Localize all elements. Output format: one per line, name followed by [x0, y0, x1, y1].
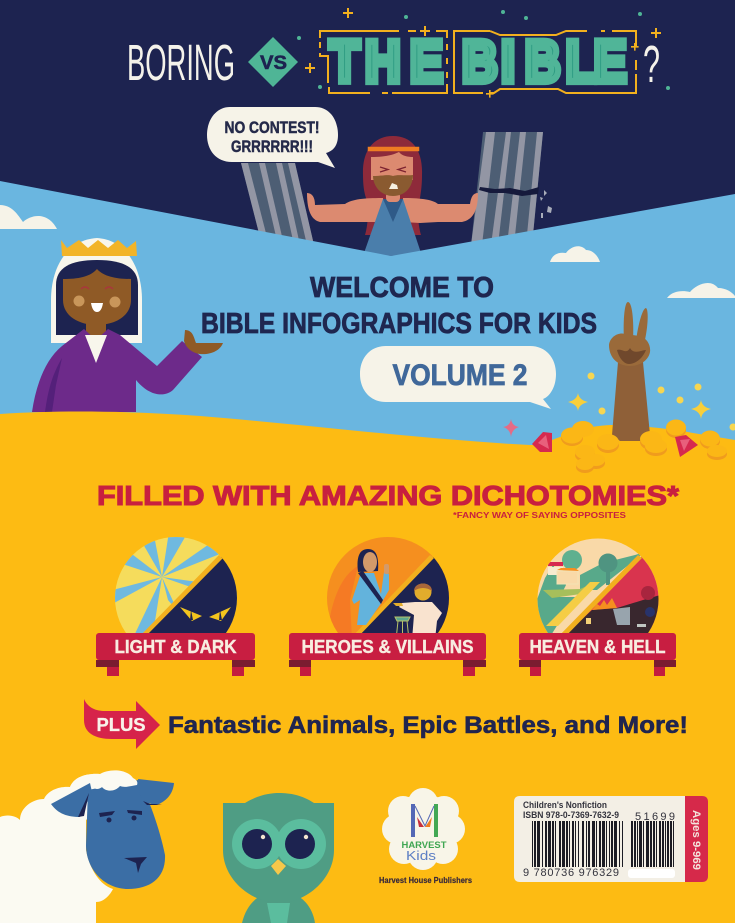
- sparkles: [305, 8, 661, 98]
- banner: heaven and hell: [519, 633, 676, 676]
- dark half: [149, 557, 237, 633]
- houses: [548, 562, 579, 584]
- barcode label: ISBN 978-0-7369-7632-9: [523, 810, 619, 820]
- hand: [184, 330, 223, 354]
- cloud centre: [550, 246, 600, 262]
- welcome heading: BIBLE INFOGRAPHICS FOR KIDS: [201, 308, 597, 340]
- speech bubble: no contest: NO CONTEST!: [224, 119, 320, 137]
- teal dots: [297, 10, 670, 90]
- right ear: [138, 779, 174, 805]
- owl body: [242, 895, 315, 923]
- owl head: [223, 793, 334, 903]
- logo text: HARVEST: [402, 840, 447, 851]
- arms: [307, 193, 478, 223]
- barcode label: Children's Nonfiction: [523, 800, 607, 810]
- head wool tuft: [70, 770, 137, 791]
- dashed title frame: [320, 31, 636, 93]
- sunburst rays: [115, 537, 219, 633]
- versus diamond: VS: [260, 53, 287, 74]
- speech bubble: no contest: [207, 107, 338, 168]
- heading: filled with amazing dichotomies: FILLED WITH AMAZING DICHOTOMIES*: [97, 480, 679, 511]
- hair: [56, 260, 138, 335]
- robe: [364, 199, 421, 256]
- crown: [61, 240, 137, 256]
- banner: light and dark: LIGHT & DARK: [114, 637, 236, 657]
- volume 2 bubble: [360, 346, 556, 409]
- hills and trees: [538, 550, 640, 633]
- hair: [363, 136, 422, 235]
- face: [63, 269, 131, 325]
- owl eyes: [232, 819, 282, 869]
- badge: heroes and villains: [327, 537, 449, 633]
- villain man: [393, 584, 442, 633]
- face: [369, 148, 418, 202]
- logo mark: [411, 804, 438, 837]
- barcode label: 51699: [635, 811, 675, 823]
- logo cloud: [382, 788, 465, 870]
- footnote: *FANCY WAY OF SAYING OPPOSITES: [453, 511, 627, 520]
- harvest kids logo: Kids: [406, 848, 437, 863]
- volume 2 bubble: VOLUME 2: [392, 359, 528, 392]
- golden road: [543, 582, 600, 626]
- ruby gem left: [532, 432, 552, 452]
- owl beak: [271, 859, 286, 875]
- left ear: [51, 783, 92, 817]
- cat eyes: [180, 607, 231, 621]
- raised hand with peace sign: [609, 302, 650, 441]
- banner: heroes and villains: [289, 633, 486, 676]
- cloud left: [0, 205, 57, 229]
- strong man with columns: [241, 132, 552, 256]
- collar: [85, 335, 107, 363]
- barcode label: [514, 796, 708, 882]
- harvest kids logo: [382, 788, 465, 870]
- title word: boring: BORING: [127, 34, 235, 91]
- plus arrow: PLUS: [96, 715, 146, 735]
- question mark: ?: [643, 36, 660, 94]
- age tab: Ages 9-969: [690, 810, 702, 870]
- sheep: [0, 770, 174, 923]
- sky: [0, 181, 735, 460]
- banner: heaven and hell: HEAVEN & HELL: [530, 637, 666, 657]
- right column: [471, 132, 552, 245]
- versus diamond: [248, 37, 298, 87]
- brows and eyes: [99, 810, 147, 873]
- title: [127, 8, 670, 98]
- owl: [223, 793, 334, 923]
- queen: [32, 238, 223, 412]
- sparkles and coins in the air: [503, 372, 735, 437]
- barcode bars: [532, 821, 675, 867]
- gold coins: [561, 420, 727, 473]
- ruby gem right: [675, 435, 698, 457]
- veil: [51, 238, 142, 343]
- title words: the bible: THE: [330, 30, 443, 94]
- tagline: Fantastic Animals, Epic Battles, and More!: [168, 712, 688, 739]
- left column: [241, 163, 314, 245]
- hell side: [582, 556, 658, 633]
- banner: heroes and villains: HEROES & VILLAINS: [302, 637, 474, 657]
- badge: heaven and hell: [538, 538, 658, 633]
- banner: light and dark: [96, 633, 255, 676]
- badge: light and dark: [115, 537, 237, 633]
- title words: the bible: BIBLE: [462, 30, 627, 94]
- wool: [0, 774, 113, 923]
- head: [86, 780, 165, 889]
- age tab: [685, 796, 708, 882]
- purple robe: [32, 329, 202, 412]
- navy background: [0, 0, 735, 300]
- welcome heading: WELCOME TO: [310, 272, 494, 304]
- speech bubble: no contest: GRRRRRR!!!: [231, 138, 313, 156]
- title words: the bible: [330, 30, 627, 94]
- hero woman: [352, 549, 389, 625]
- yellow ground: [0, 412, 735, 923]
- welcome heading: [201, 272, 597, 340]
- white patch: [628, 869, 675, 878]
- plus arrow: [84, 699, 160, 749]
- cloud right: [667, 283, 735, 298]
- publisher name: Harvest House Publishers: [379, 875, 472, 885]
- barcode digits: 9 780736 976329: [523, 867, 619, 879]
